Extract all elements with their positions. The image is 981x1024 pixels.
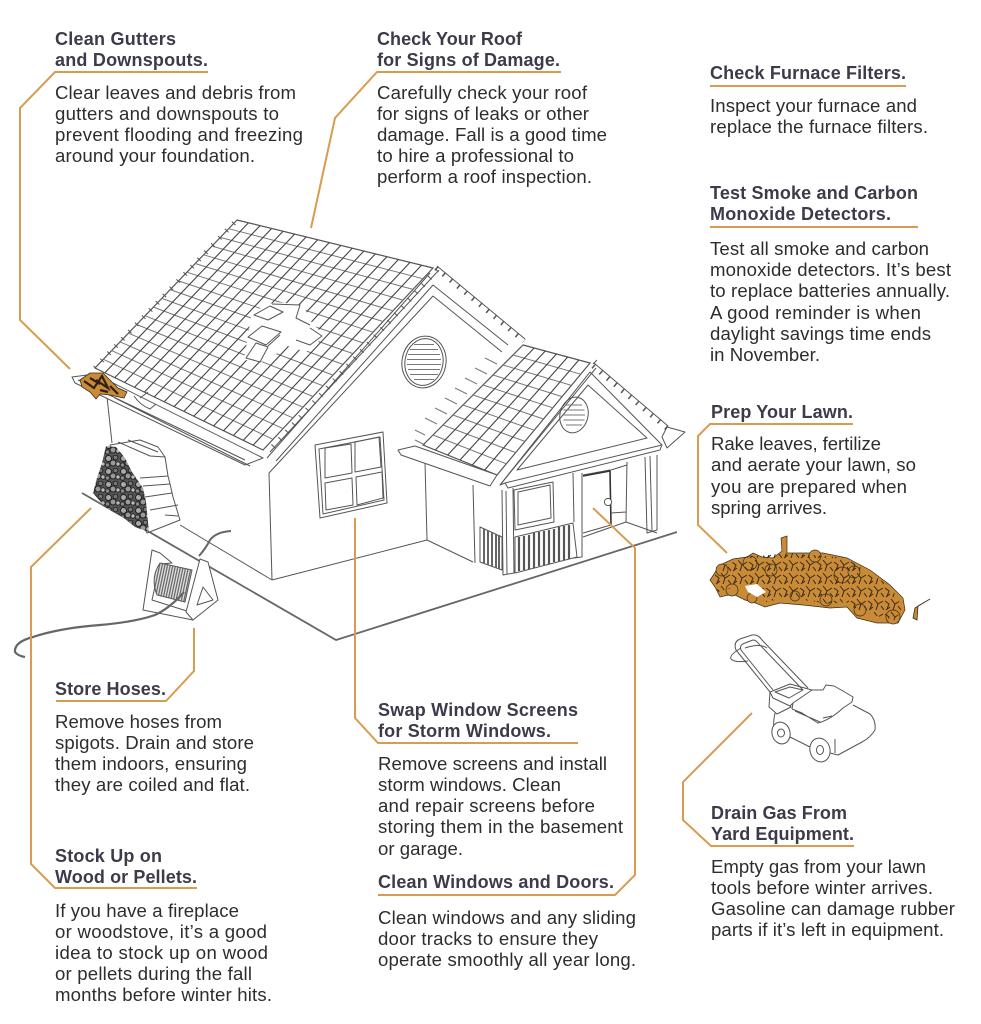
panel: check roof (377, 29, 607, 187)
connector: clean gutters (20, 72, 208, 369)
body text: and aerate your lawn, so (711, 454, 916, 475)
heading: Clean Windows and Doors. (378, 872, 614, 892)
heading line 2: for Signs of Damage. (377, 50, 560, 70)
body text: Carefully check your roof (377, 82, 588, 103)
body text (710, 95, 928, 137)
body text: them indoors, ensuring (55, 753, 247, 774)
body text: parts if it’s left in equipment. (711, 919, 944, 940)
round attic vent (398, 333, 450, 391)
body text: Clean windows and any sliding (378, 907, 636, 928)
main roof right edge steps (436, 268, 524, 341)
connector: smoke detectors underline (710, 226, 918, 228)
mower handle (731, 635, 808, 692)
roof stepped edges (92, 223, 437, 453)
left wall (107, 397, 272, 580)
body text: in November. (710, 344, 820, 365)
coil (154, 563, 192, 602)
panel: smoke and carbon monoxide detectors (710, 183, 952, 365)
body text: Clear leaves and debris from (55, 82, 296, 103)
body text: Gasoline can damage rubber (711, 898, 955, 919)
body text: gutters and downspouts to (55, 103, 279, 124)
body text: storm windows. Clean (378, 774, 561, 795)
main gutter (72, 374, 263, 465)
body text: damage. Fall is a good time (377, 124, 607, 145)
connector: clean windows and doors (378, 508, 635, 895)
body text: Remove screens and install (378, 753, 607, 774)
body text: tools before winter arrives. (711, 877, 933, 898)
body text: or garage. (378, 838, 463, 859)
damaged roof patch (244, 302, 325, 362)
body text (55, 900, 272, 1005)
woodpile (93, 440, 180, 533)
body text: idea to stock up on wood (55, 942, 268, 963)
lawn mower (731, 635, 875, 764)
downspout opening (134, 392, 156, 409)
body text (377, 82, 607, 187)
hose (15, 592, 184, 657)
body text: operate smoothly all year long. (378, 949, 636, 970)
body text (711, 856, 955, 940)
body text (378, 753, 624, 859)
roof overhang line (270, 270, 439, 452)
porch roof right edge steps (593, 366, 668, 429)
main roof right edge line (437, 266, 525, 339)
large window (315, 432, 387, 518)
heading: Store Hoses. (55, 679, 166, 699)
body text: Test all smoke and carbon (710, 238, 929, 259)
gutter leaves (80, 373, 127, 399)
connector: wood or pellets (31, 508, 197, 888)
panel: drain gas from yard equipment (711, 803, 955, 940)
heading: Swap Window Screens (378, 700, 578, 720)
panel: swap window screens (378, 700, 624, 859)
gutter inner line (78, 380, 250, 466)
body text (378, 907, 636, 970)
heading line 2: for Storm Windows. (378, 721, 551, 741)
heading: Drain Gas From (711, 803, 847, 823)
body text: spigots. Drain and store (55, 732, 254, 753)
roof tile columns (105, 223, 422, 445)
porch gutter end (662, 427, 685, 448)
hose end behind reel (199, 531, 231, 556)
wing tile courses (433, 355, 581, 464)
heading: Check Your Roof (377, 29, 523, 49)
connector: furnace filters underline (710, 85, 906, 87)
body text (55, 82, 303, 166)
heading: Prep Your Lawn. (711, 402, 853, 422)
body text: Empty gas from your lawn (711, 856, 926, 877)
heading line 2: Monoxide Detectors. (710, 204, 891, 224)
body text: perform a roof inspection. (377, 166, 592, 187)
wing roof surface (423, 345, 590, 475)
panel: clean gutters (55, 29, 303, 166)
mower deck (774, 705, 875, 755)
reel right frame (186, 559, 218, 620)
platform edge (82, 493, 677, 640)
connector: store hoses (56, 628, 194, 701)
body text: Remove hoses from (55, 711, 222, 732)
wing gutter (398, 446, 497, 486)
body text: door tracks to ensure they (378, 928, 599, 949)
body text: or pellets during the fall (55, 963, 252, 984)
body text: spring arrives. (711, 497, 827, 518)
body text: or woodstove, it’s a good (55, 921, 267, 942)
body text (55, 711, 254, 795)
body text: monoxide detectors. It’s best (710, 259, 952, 280)
roof surface (95, 220, 433, 450)
connector: storm windows (355, 518, 578, 743)
heading line 2: Yard Equipment. (711, 824, 854, 844)
body text (710, 238, 952, 365)
body text: daylight savings time ends (710, 323, 931, 344)
body text: Inspect your furnace and (710, 95, 917, 116)
front wall and gable trim (267, 273, 508, 580)
heading: Check Furnace Filters. (710, 63, 906, 83)
panel: stock up on wood or pellets (55, 846, 272, 1005)
porch columns and window (502, 455, 657, 575)
body text: around your foundation. (55, 145, 255, 166)
panel: furnace filters (710, 63, 928, 137)
panel: clean windows and doors (378, 872, 636, 970)
panel: store hoses (55, 679, 254, 795)
gable vent (556, 394, 592, 436)
heading: Clean Gutters (55, 29, 176, 49)
front door (583, 462, 657, 537)
body text: you are prepared when (711, 476, 907, 497)
body text (711, 433, 916, 518)
side wing walls (425, 462, 475, 563)
body text: months before winter hits. (55, 984, 272, 1005)
panel: prep your lawn (711, 402, 916, 518)
heading line 2: and Downspouts. (55, 50, 208, 70)
reel left frame and base (143, 550, 193, 620)
fuel tank (769, 684, 812, 714)
body text: for signs of leaks or other (377, 103, 589, 124)
engine cover (792, 685, 853, 723)
heading: Test Smoke and Carbon (710, 183, 918, 203)
connector: prep lawn (698, 424, 853, 553)
heading: Stock Up on (55, 846, 162, 866)
body text: and repair screens before (378, 795, 595, 816)
wing roof (415, 266, 590, 475)
wing tile columns (435, 348, 579, 470)
mower wheels (769, 720, 833, 764)
body text: replace the furnace filters. (710, 116, 928, 137)
body text: If you have a fireplace (55, 900, 239, 921)
porch roof right edge line (594, 363, 668, 426)
connector: yard equipment (683, 713, 854, 846)
body text: to hire a professional to (377, 145, 574, 166)
wing tile overhang ticks (415, 358, 497, 445)
main roof (92, 220, 439, 453)
heading line 2: Wood or Pellets. (55, 867, 197, 887)
body text: to replace batteries annually. (710, 280, 950, 301)
body text: prevent flooding and freezing (55, 124, 303, 145)
body text: they are coiled and flat. (55, 774, 250, 795)
leaf pile (710, 536, 930, 624)
connector: check roof (311, 72, 561, 228)
body text: A good reminder is when (710, 302, 921, 323)
porch railing (480, 523, 577, 573)
roof tile courses (103, 229, 423, 439)
body text: storing them in the basement (378, 816, 624, 837)
body text: Rake leaves, fertilize (711, 433, 881, 454)
hose reel (15, 531, 231, 657)
house illustration (15, 220, 685, 657)
porch gable (500, 360, 685, 488)
